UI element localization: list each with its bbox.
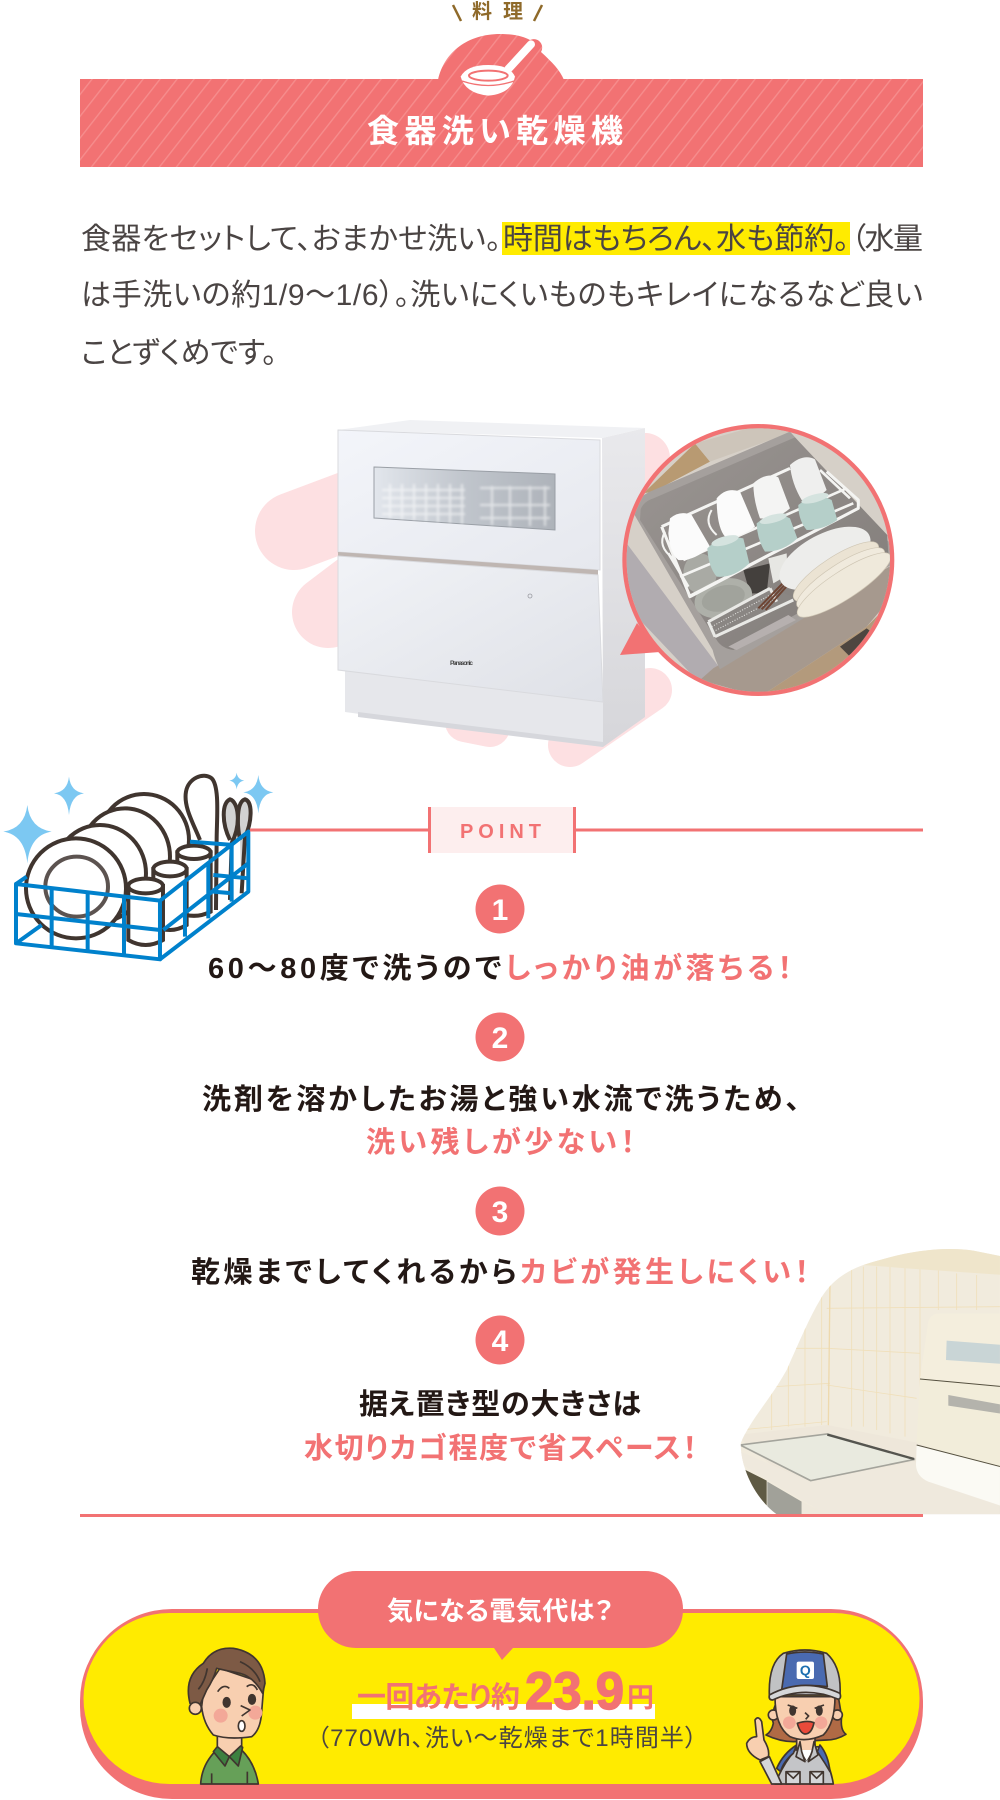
- point 4: 据え置き型の大きさは: [359, 1388, 641, 1421]
- speech bubble: 気になる電気代は？: [387, 1596, 613, 1626]
- illustration: woman in cap: Q: [800, 1662, 811, 1678]
- point 2: 洗剤を溶かしたお湯と強い水流で洗うため、: [202, 1083, 800, 1116]
- intro paragraph: [81, 222, 923, 370]
- inside photo circle: [620, 420, 900, 700]
- usage note: （770Wh、洗い～乾燥まで1時間半）: [317, 1725, 697, 1752]
- category label: 料理: 料: [472, 0, 492, 23]
- point header: [250, 807, 923, 853]
- point 4: [304, 1316, 697, 1465]
- decorative pink blobs: [294, 458, 650, 745]
- category label: 料理: 理: [503, 1, 523, 23]
- cream dishwasher: [916, 1340, 1000, 1506]
- counter: [828, 1425, 829, 1427]
- bottom rule: [80, 1514, 923, 1517]
- point 1: 60～80度で洗うのでしっかり油が落ちる！: [208, 951, 792, 985]
- top: [338, 420, 645, 438]
- upper door: [338, 430, 600, 570]
- highlight: [502, 222, 850, 255]
- intro paragraph: （水量: [851, 223, 923, 256]
- point 4: 水切りカゴ程度で省スペース！: [304, 1431, 697, 1465]
- intro paragraph: は手洗いの約1/9～1/6）。洗いにくいものもキレイになるなど良い: [81, 279, 923, 312]
- point 4: 4: [492, 1325, 509, 1358]
- intro paragraph: 時間はもちろん、水も節約。: [503, 223, 849, 256]
- illustration: woman in cap: [747, 1650, 846, 1784]
- base: [345, 670, 603, 747]
- banner header: [80, 34, 923, 167]
- cupboard below counter: [745, 1470, 767, 1506]
- intro paragraph: ことずくめです。: [81, 337, 277, 370]
- intro paragraph: 食器をセットして、おまかせ洗い。: [81, 223, 501, 256]
- panel background: [80, 1609, 923, 1799]
- price: [352, 1662, 655, 1721]
- icon: dish rack with sparkles: [3, 773, 273, 959]
- door outer side: [626, 544, 718, 680]
- power button: [528, 594, 532, 598]
- cabinet underside: [863, 1247, 1000, 1275]
- cooktop: [740, 1434, 915, 1481]
- point 1: 1: [492, 894, 508, 927]
- plates: [26, 794, 189, 938]
- point 3: 乾燥までしてくれるからカビが発生しにくい！: [191, 1255, 809, 1289]
- side panel: [602, 428, 645, 747]
- price: 一回あたり約: [357, 1681, 520, 1714]
- sparkles: [3, 773, 273, 863]
- speech bubble: [318, 1571, 683, 1660]
- brand text: Panasonic: [450, 660, 473, 667]
- price: 23.9: [525, 1662, 624, 1721]
- wire basket: [16, 832, 248, 959]
- plates: [780, 526, 890, 618]
- bottom plate: [728, 615, 796, 650]
- drawer front: [700, 563, 895, 697]
- tub rim: [633, 432, 893, 669]
- point 2: 2: [492, 1022, 508, 1055]
- small plate behind bowl: [683, 553, 717, 593]
- category label: 料理: [453, 0, 542, 23]
- white cups: [668, 457, 827, 560]
- kitchen photo blob: [737, 1247, 1000, 1517]
- celadon bowls: [707, 497, 837, 577]
- window: [374, 467, 555, 530]
- price: 円: [627, 1683, 654, 1713]
- heading: 食器洗い乾燥機: [367, 113, 623, 149]
- cups: [128, 846, 211, 945]
- electricity cost panel: [80, 1571, 923, 1799]
- point badge: POINT: [460, 821, 541, 843]
- tub interior: [640, 437, 889, 650]
- dome behind banner: [438, 34, 564, 80]
- point 3: [191, 1186, 809, 1289]
- gray bowl: [694, 578, 752, 618]
- point 1: [208, 884, 792, 985]
- cutlery basket: [708, 553, 793, 637]
- tile walls: [740, 1267, 1000, 1440]
- wood and wall behind: [643, 443, 710, 493]
- illustration: man: [188, 1648, 265, 1784]
- seam: [338, 552, 598, 575]
- point 3: 3: [492, 1196, 508, 1229]
- icon: frying pan: [461, 44, 531, 96]
- point 2: 洗い残しが少ない！: [366, 1125, 635, 1159]
- utensils: [186, 776, 251, 910]
- lower door: [338, 556, 603, 702]
- callout tail: [620, 623, 660, 655]
- banner bar: [80, 79, 923, 167]
- dishwasher product photo: [338, 420, 645, 747]
- cutlery shadow: [743, 563, 770, 593]
- point 2: [202, 1012, 800, 1159]
- wire rack: [662, 468, 858, 597]
- point badge: [428, 807, 576, 853]
